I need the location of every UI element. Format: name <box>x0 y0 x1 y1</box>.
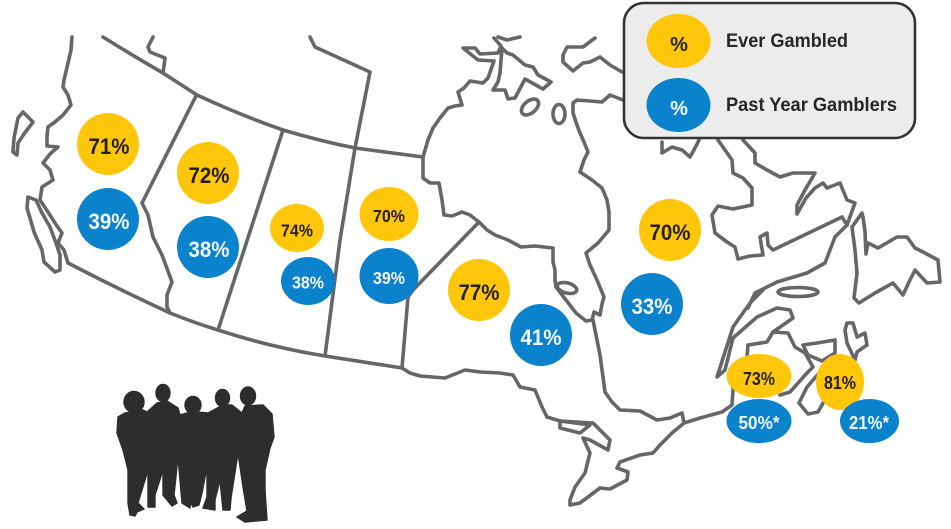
Saskatchewan Manitoba border <box>325 148 355 356</box>
New Brunswick past year: 50%* <box>738 413 780 433</box>
Saskatchewan ever gambled <box>270 204 324 252</box>
Quebec Ontario border <box>593 320 684 423</box>
Manitoba past year: 39% <box>373 268 405 288</box>
Saskatchewan past year: 38% <box>292 272 324 292</box>
BC Alberta border <box>142 96 196 313</box>
New Brunswick coast <box>747 332 773 357</box>
Nova Scotia past year <box>840 399 899 443</box>
legend: ever gambled swatch: % <box>670 34 688 56</box>
legend: past year label: Past Year Gamblers <box>726 95 897 116</box>
Quebec ever gambled: 70% <box>650 220 690 245</box>
Vancouver Island <box>27 197 60 272</box>
northern Nunavut shapes <box>493 48 551 99</box>
Alberta ever gambled: 72% <box>188 163 230 188</box>
legend: ever gambled label: Ever Gambled <box>726 31 848 52</box>
silhouette of five people <box>117 384 274 522</box>
Cape Breton <box>845 323 867 360</box>
Nova Scotia <box>799 372 826 414</box>
Alberta past year: 38% <box>188 237 230 262</box>
legend <box>624 3 915 138</box>
Ontario ever gambled: 77% <box>458 280 500 305</box>
Nunavut border <box>310 37 370 148</box>
Manitoba ever gambled: 70% <box>373 206 405 226</box>
Yukon border <box>148 37 165 73</box>
Quebec St Lawrence southern border <box>684 375 733 423</box>
Labrador <box>743 140 855 225</box>
Alberta Saskatchewan border <box>218 130 283 330</box>
Saskatchewan past year <box>281 257 335 305</box>
Haida Gwaii <box>13 112 33 155</box>
Quebec ever gambled <box>639 199 701 261</box>
Alberta ever gambled <box>177 142 239 204</box>
Manitoba Ontario border <box>402 222 479 368</box>
British Columbia ever gambled: 71% <box>88 134 130 159</box>
Prince Edward Island <box>803 340 835 361</box>
Ontario ever gambled <box>448 259 510 321</box>
Quebec past year <box>621 273 683 335</box>
Quebec past year: 33% <box>632 294 672 319</box>
Saskatchewan ever gambled: 74% <box>281 220 313 240</box>
Alberta past year <box>177 216 239 278</box>
Ontario southern border <box>402 368 684 505</box>
legend: past year swatch: % <box>670 98 688 120</box>
British Columbia past year <box>77 188 139 250</box>
Nova Scotia ever gambled: 81% <box>824 373 856 393</box>
British Columbia coast <box>40 37 72 263</box>
Ungava and northern Quebec coast <box>662 140 699 157</box>
Anticosti Island <box>778 288 818 296</box>
Nova Scotia past year: 21%* <box>849 413 889 433</box>
Hudson Bay and James Bay coast <box>423 38 501 157</box>
Ontario past year: 41% <box>520 325 562 350</box>
British Columbia past year: 39% <box>88 209 130 234</box>
60th parallel <box>103 37 423 157</box>
New Brunswick ever gambled <box>726 354 792 398</box>
Manitoba past year <box>360 248 418 304</box>
Ontario past year <box>510 304 572 366</box>
Newfoundland <box>852 213 940 303</box>
legend: ever gambled swatch <box>646 14 710 68</box>
New Brunswick ever gambled: 73% <box>743 369 775 389</box>
legend: past year swatch <box>646 78 710 132</box>
New Brunswick past year <box>726 399 792 443</box>
Nova Scotia ever gambled <box>816 354 864 410</box>
US border, western provinces <box>68 263 402 368</box>
Gaspe peninsula and Gulf coast <box>717 290 813 395</box>
British Columbia ever gambled <box>77 113 139 175</box>
Manitoba ever gambled <box>360 187 418 241</box>
Hudson Bay islands <box>518 96 542 118</box>
